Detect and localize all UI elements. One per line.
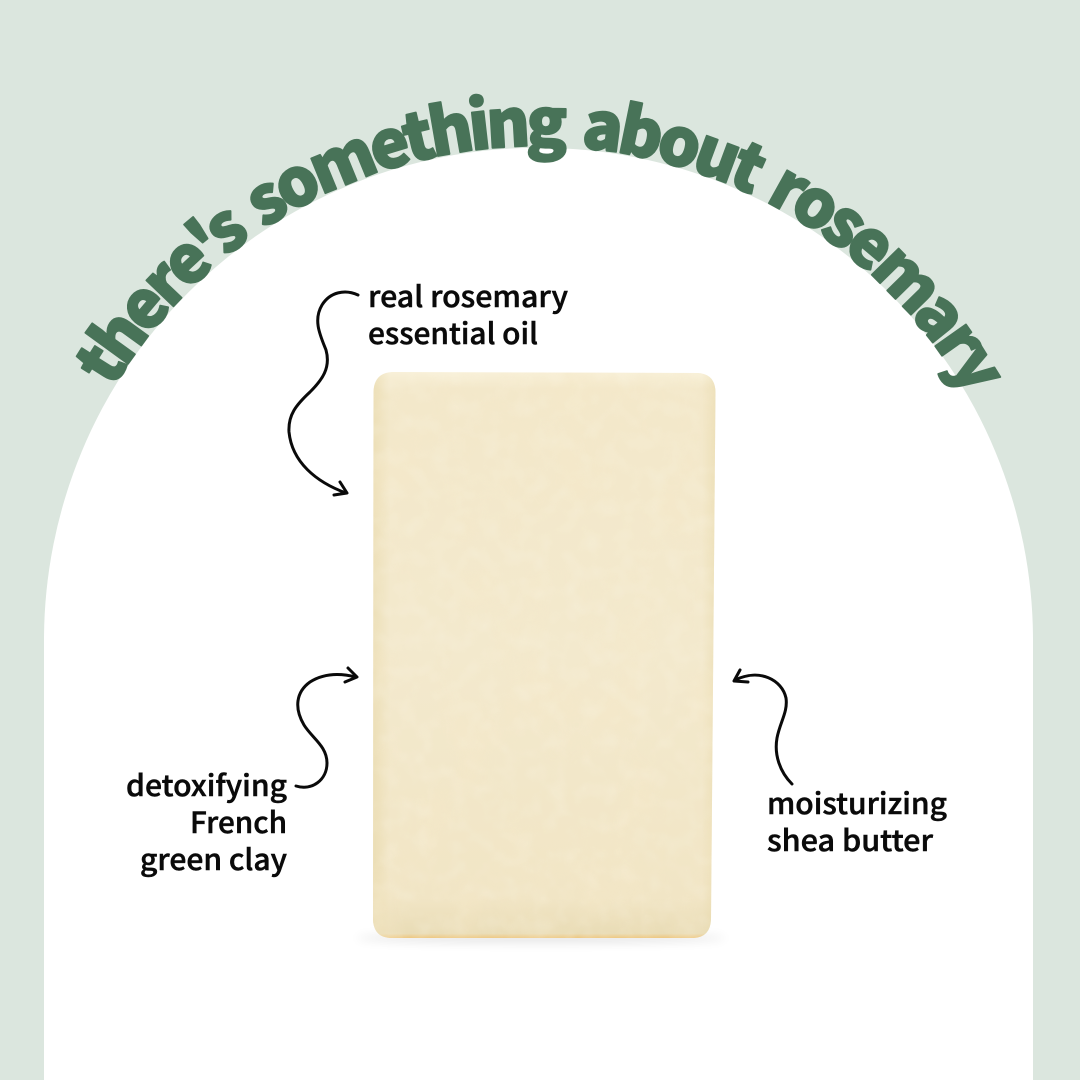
label: moisturizing shea butter: moisturizing <box>767 781 947 823</box>
arrow: real rosemary essential oil <box>289 292 358 495</box>
arrow: detoxifying French green clay <box>296 668 357 787</box>
label: moisturizing shea butter: shea butter <box>767 818 933 860</box>
white arch panel <box>44 148 1033 1080</box>
arrow: moisturizing shea butter <box>734 670 792 784</box>
label: real rosemary essential oil <box>368 274 568 353</box>
label: moisturizing shea butter <box>767 781 947 860</box>
label: real rosemary essential oil: real rosemary <box>368 274 568 316</box>
label: detoxifying French green clay <box>126 763 287 879</box>
soap bar <box>356 372 726 943</box>
label: detoxifying French green clay: detoxifying <box>126 763 287 805</box>
label: detoxifying French green clay: French <box>190 800 287 842</box>
label: real rosemary essential oil: essential oil <box>368 311 538 353</box>
label: detoxifying French green clay: green clay <box>140 837 287 879</box>
title: there's something about rosemary <box>76 94 1002 388</box>
